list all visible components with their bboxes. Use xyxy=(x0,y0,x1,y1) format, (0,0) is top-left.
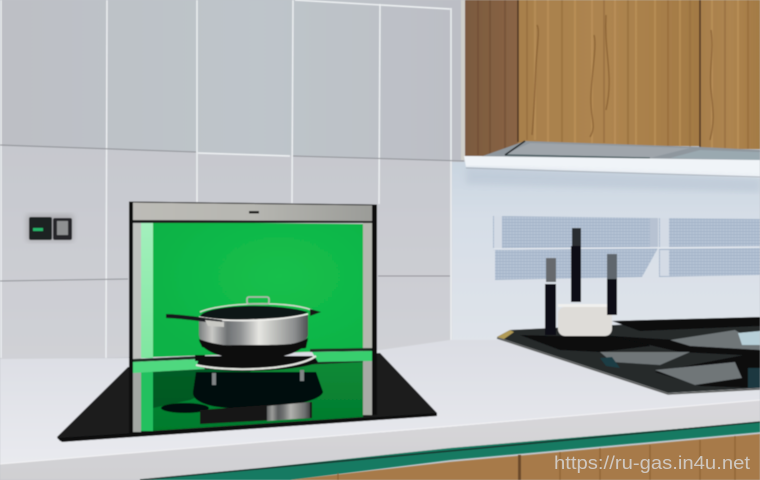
backsplash right xyxy=(452,162,760,352)
lower cabinet with green trim xyxy=(140,422,760,480)
wall switch xyxy=(27,215,73,241)
tiled wall xyxy=(0,0,470,360)
back panel frame xyxy=(129,202,377,373)
wall tile strip with mosaic panels xyxy=(493,216,760,280)
wooden upper cabinets xyxy=(461,0,760,160)
countertop xyxy=(0,340,760,480)
pot reflection xyxy=(161,370,323,424)
cooking pot xyxy=(166,297,321,371)
range hood and light strip xyxy=(464,141,760,192)
utensil handles xyxy=(545,228,617,335)
watermark url: https://ru-gas.in4u.net xyxy=(554,453,750,473)
induction hob glass xyxy=(57,352,437,442)
small white saucepan xyxy=(558,304,612,336)
gas cooktop xyxy=(497,317,760,394)
